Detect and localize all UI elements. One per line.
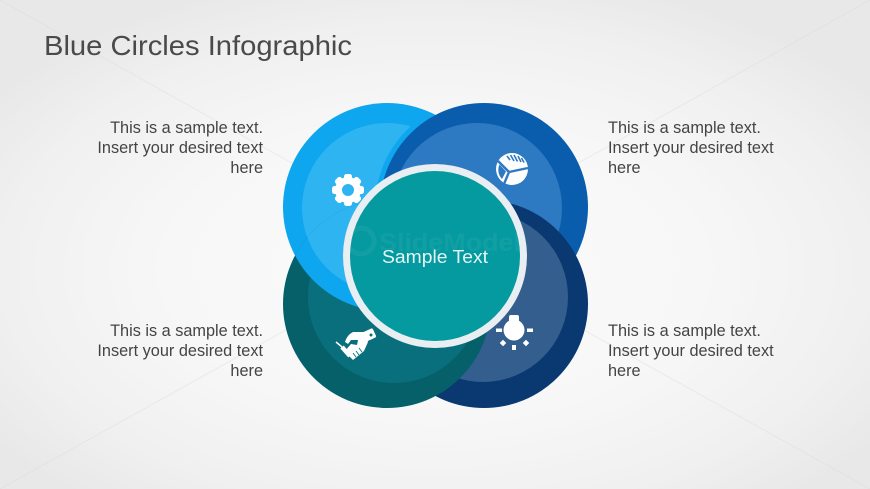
title: Blue Circles Infographic <box>44 30 352 61</box>
text block: top left: Insert your desired text <box>97 139 263 157</box>
circle: bottom right navy <box>380 200 588 408</box>
text block: top right: This is a sample text. <box>608 119 761 137</box>
center label: Sample Text <box>382 246 488 267</box>
text block: bottom right: Insert your desired text <box>608 342 774 360</box>
circle: top right blue <box>380 103 588 311</box>
icon: pie chart <box>496 153 528 185</box>
circle: bottom left dark teal <box>283 200 491 408</box>
text block: bottom left <box>97 322 263 380</box>
text block: top left <box>97 119 263 177</box>
watermark: SlideModel <box>379 229 521 257</box>
text block: bottom left: This is a sample text. <box>110 322 263 340</box>
icon: gear <box>332 174 364 206</box>
circle: top left overlap on dark teal <box>295 204 360 307</box>
icon: handshake <box>336 328 377 360</box>
text block: top left: This is a sample text. <box>110 119 263 137</box>
text block: bottom right: This is a sample text. <box>608 322 761 340</box>
text block: top right: Insert your desired text <box>608 139 774 157</box>
text block: bottom right: here <box>608 362 641 380</box>
text block: bottom left: here <box>230 362 263 380</box>
text block: top left: here <box>230 159 263 177</box>
text block: top right <box>608 119 774 177</box>
central circle <box>343 164 527 348</box>
text block: bottom right <box>608 322 774 380</box>
icon: light bulb <box>496 315 533 350</box>
circle: top left light blue <box>283 103 436 256</box>
text block: top right: here <box>608 159 641 177</box>
text block: bottom left: Insert your desired text <box>97 342 263 360</box>
